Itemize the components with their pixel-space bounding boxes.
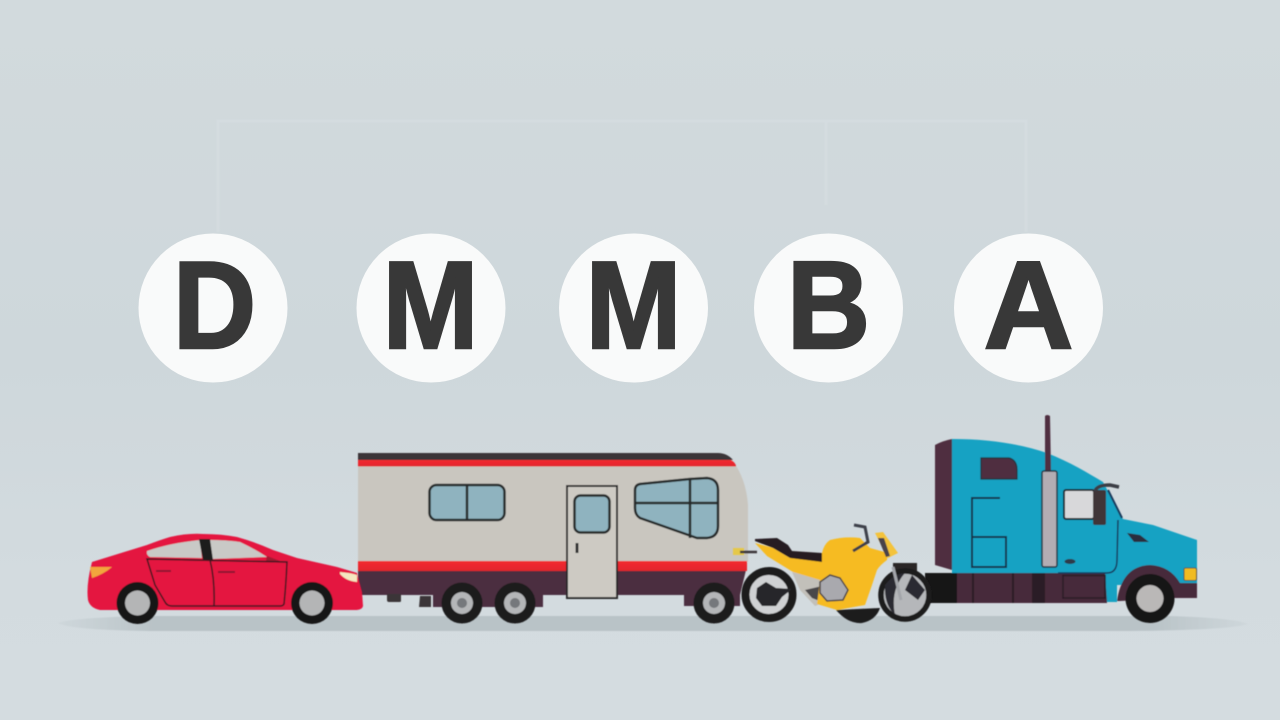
- faint connector lines: [218, 121, 1026, 232]
- rear wheel: [746, 571, 792, 618]
- top fender: [893, 563, 917, 572]
- letter badge: A: [954, 234, 1103, 382]
- headlight: [340, 572, 357, 582]
- camper trailer: [358, 453, 748, 624]
- engine: [820, 575, 848, 601]
- front wheel: [291, 582, 333, 624]
- front fender shadow wheel: [836, 608, 880, 623]
- door: [567, 486, 617, 598]
- exhaust shield: [1042, 471, 1057, 567]
- door lines: [147, 559, 287, 606]
- windows: [147, 540, 202, 558]
- camper roof: [358, 453, 733, 460]
- front cowl: [875, 532, 898, 558]
- cab body: [952, 439, 1197, 602]
- tail light: [733, 548, 744, 555]
- road shadow: [58, 616, 1248, 631]
- rear wheel: [116, 582, 158, 624]
- fork: [893, 567, 901, 600]
- car body: [88, 534, 363, 610]
- rear wheel 1: [442, 582, 482, 624]
- letter badge: M: [559, 234, 708, 382]
- letter badge: D: D: [173, 237, 256, 375]
- exhaust pipe: [1045, 415, 1051, 471]
- handlebar: [853, 525, 868, 551]
- front wheel: [881, 571, 929, 619]
- front wheel: [694, 582, 734, 624]
- letter badge: B: [754, 234, 903, 382]
- sleeper rear panel: [935, 439, 952, 570]
- camper body: [358, 460, 748, 562]
- letter badge: B: B: [787, 237, 870, 375]
- pillar: [199, 539, 213, 560]
- letter badge: A: A: [984, 237, 1073, 375]
- letter badge: M: M: [382, 237, 479, 375]
- letter badge: D: [138, 234, 288, 382]
- seat: [755, 538, 822, 562]
- side window: [1064, 490, 1094, 519]
- silver frame: [792, 572, 826, 606]
- side box: [1063, 576, 1105, 598]
- semi truck: [925, 415, 1197, 623]
- hood vent: [1127, 533, 1149, 542]
- truck wheel: [1126, 574, 1174, 623]
- chassis: [925, 573, 1107, 603]
- windshield post: [1108, 490, 1122, 518]
- cab door outline: [1058, 520, 1118, 573]
- rear wheel 2: [494, 582, 536, 624]
- step and hitch: [387, 594, 431, 607]
- bike fuel tank and fairing: [755, 537, 888, 610]
- sleeper vent: [981, 458, 1017, 479]
- marker light: [1184, 568, 1196, 580]
- letter badge: M: M: [585, 237, 682, 375]
- sleeper storage door: [972, 498, 1006, 567]
- yellow motorcycle: [733, 525, 929, 623]
- right wedge window: [635, 478, 718, 538]
- front fender: [1117, 565, 1197, 601]
- door handle: [1064, 559, 1076, 564]
- left window: [430, 485, 504, 520]
- rear wheel arches: [433, 575, 543, 607]
- camper lower skirt: [358, 570, 746, 595]
- tail light: [90, 567, 112, 578]
- mirror: [1093, 485, 1119, 525]
- red car: [88, 534, 363, 624]
- letter badge: M: [356, 234, 506, 382]
